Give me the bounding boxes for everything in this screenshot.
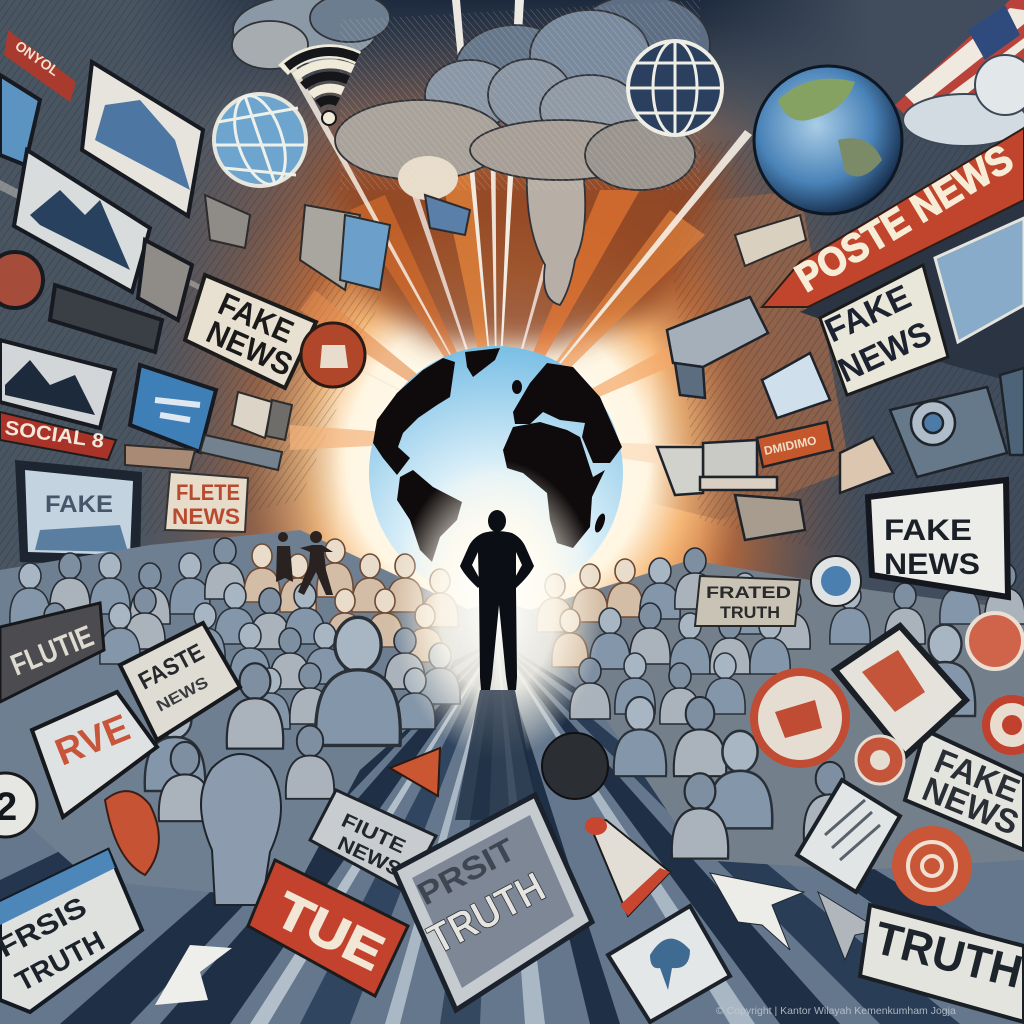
- sign: fake news left: [185, 275, 316, 388]
- sign: fake news upper right: NEWS: [832, 314, 937, 390]
- side wall right hatching: [660, 100, 1024, 600]
- icon: wire globe left: [214, 89, 306, 191]
- icon: wifi: [283, 51, 358, 125]
- central figure: [460, 510, 534, 690]
- sign: fiute news: [310, 790, 436, 892]
- crowd left: [10, 538, 460, 821]
- crowd base left: [0, 530, 470, 900]
- sign: fake news lower right: NEWS: [917, 770, 1024, 843]
- side wall left: [0, 0, 340, 580]
- top-left red tag: [4, 30, 76, 102]
- white icon sign: [608, 906, 730, 1022]
- cloud hatching: [340, 0, 700, 190]
- dark sign with red square: [835, 626, 966, 756]
- sign: first truth: TRUTH: [10, 925, 110, 997]
- icon: target circles: [754, 613, 1024, 906]
- left foreground signs: RVE: [50, 707, 136, 774]
- crowd base right: [530, 560, 1024, 870]
- red banner: social: [0, 412, 116, 460]
- sign: frated truth: [695, 576, 800, 626]
- monitor: fake news right: FAKE: [884, 514, 972, 547]
- central figure shadow: [455, 690, 540, 820]
- sign: first truth: [0, 850, 142, 1012]
- red triangle: [390, 748, 440, 796]
- left foreground signs: FLUTIE: [6, 620, 98, 682]
- sign: fake news upper right: [819, 265, 948, 395]
- white arrow: [710, 873, 804, 950]
- floor streaks: [0, 640, 1024, 1024]
- sign: fiute news: FIUTE: [338, 810, 409, 858]
- small signs center-left: [125, 195, 806, 470]
- dark sphere: [542, 733, 608, 799]
- sign: tue: TUE: [267, 882, 392, 981]
- central globe: [369, 346, 623, 600]
- monitor: fake news right: NEWS: [884, 548, 980, 581]
- icon: red circle: [301, 323, 365, 387]
- white arrow bottom left: [155, 945, 232, 1005]
- book: [797, 780, 900, 892]
- radiating rays: [0, 0, 752, 470]
- sign: fake news upper right: FAKE: [819, 278, 917, 350]
- small text on orange sign: DMIDIMO: [763, 433, 818, 458]
- flag and clouds: [895, 0, 1024, 146]
- rust zone under cloud: [330, 170, 720, 345]
- side wall right: [700, 0, 1024, 600]
- side wall left hatching: [0, 0, 380, 570]
- sign: frated truth: TRUTH: [720, 603, 780, 622]
- monitor: fake left: FAKE: [45, 491, 113, 518]
- left foreground signs: NEWS: [154, 674, 212, 716]
- small arrow right: [818, 892, 880, 960]
- light glow around figure: [392, 460, 602, 760]
- side wall right warm: [640, 190, 850, 520]
- sign: fake news red text: [165, 472, 248, 532]
- sign: fake news left: FAKE: [213, 286, 299, 350]
- sign: prsit truth: TRUTH: [420, 863, 553, 963]
- top-left screens: [0, 62, 216, 452]
- sign: prsit truth: PRSIT: [411, 831, 521, 912]
- right wall panels: [657, 218, 1024, 540]
- icon: earth globe top right: [754, 66, 902, 214]
- red banner: social: SOCIAL 8: [3, 417, 105, 453]
- icon: blue circle: [811, 556, 861, 606]
- left foreground signs: [0, 603, 240, 875]
- monitor: fake left: [15, 460, 142, 566]
- monitor: fake news right: [868, 480, 1008, 597]
- dark sky band: [0, 0, 1024, 130]
- icon: megaphone: [585, 817, 670, 916]
- mushroom cloud: [232, 0, 710, 305]
- sign: fake news lower right: [905, 730, 1024, 850]
- crowd right: [537, 548, 1024, 859]
- top-left red tag: ONYOL: [12, 37, 63, 79]
- sign: fiute news: NEWS: [334, 833, 405, 881]
- dark panel behind right signs: [800, 195, 1024, 385]
- small silhouettes near globe: [276, 531, 333, 595]
- big foreground person: [201, 754, 281, 905]
- icon: wire globe right: [628, 41, 722, 135]
- sign: fake news left: NEWS: [201, 314, 298, 383]
- left foreground signs: FASTE: [134, 639, 209, 695]
- floor base: [0, 600, 1024, 1024]
- copyright line: © Copyright | Kantor Wilayah Kemenkumham Jogja: [716, 1005, 956, 1017]
- sign: fake news red text: NEWS: [172, 504, 240, 529]
- sign: fake news red text: FLETE: [176, 480, 240, 505]
- sign: prsit truth: [394, 795, 592, 1010]
- sign: tue: [248, 860, 408, 996]
- sign: frated truth: FRATED: [706, 583, 791, 602]
